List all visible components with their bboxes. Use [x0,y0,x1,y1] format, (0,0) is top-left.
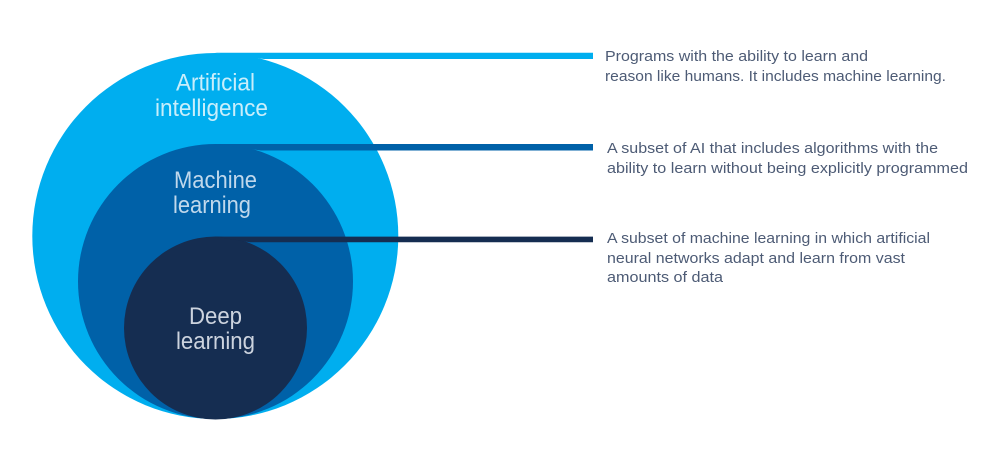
heading: deep learning [176,303,255,355]
panel: artificial intelligence circle with leader line [32,53,593,419]
text block: artificial intelligence description [605,49,946,85]
text block: artificial intelligence description: reason like humans. It includes machine learning. [605,69,946,85]
heading: artificial intelligence: intelligence [155,95,268,122]
text block: machine learning description: A subset of AI that includes algorithms with the [607,141,938,157]
heading: machine learning: Machine [174,167,257,194]
heading: deep learning: learning [176,328,255,355]
text block: deep learning description: A subset of machine learning in which artificial [607,231,930,247]
text block: deep learning description [607,231,930,286]
text block: deep learning description: neural networks adapt and learn from vast [607,251,905,267]
text block: artificial intelligence description: Programs with the ability to learn and [605,49,868,65]
heading: artificial intelligence: Artificial [176,70,255,96]
text block: machine learning description [607,141,968,177]
heading: machine learning: learning [173,192,251,219]
panel: machine learning circle with leader line [78,144,593,419]
text block: deep learning description: amounts of data [607,270,724,286]
heading: machine learning [173,167,257,219]
panel: deep learning circle with leader line [124,236,593,420]
heading: deep learning: Deep [189,303,242,330]
heading: artificial intelligence [155,70,268,122]
text block: machine learning description: ability to learn without being explicitly programmed [607,161,968,177]
